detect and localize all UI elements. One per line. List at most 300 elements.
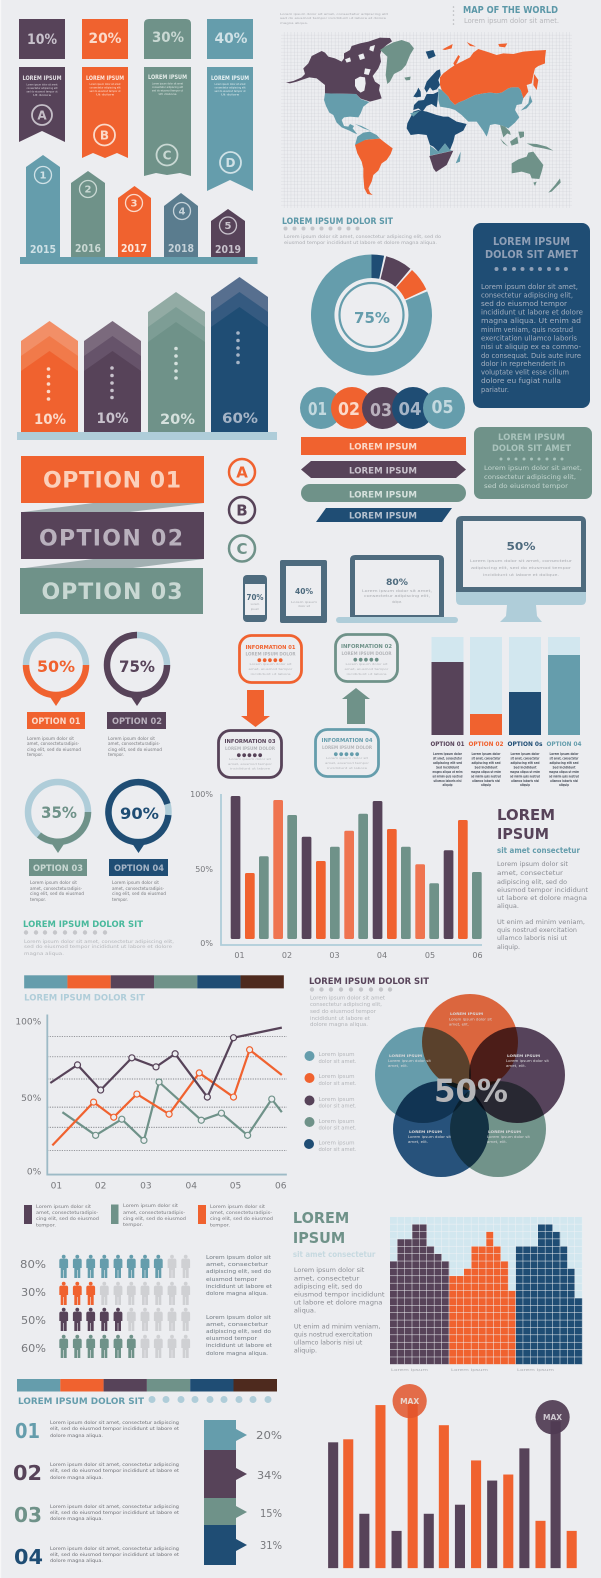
color strip <box>17 1379 277 1392</box>
side text column chart: Lorem ipsum dolor sit <box>497 861 569 868</box>
venn diagram: amet, elit. <box>388 1064 408 1068</box>
people notes <box>206 1255 273 1357</box>
venn diagram: LOREM IPSUM <box>389 1053 422 1058</box>
numbered circles: 04 <box>398 399 422 420</box>
stacked option bars: sit amet, consectetur <box>510 756 540 760</box>
people notes: dolore magna aliqua. <box>206 1291 268 1297</box>
venn diagram: LOREM IPSUM <box>507 1053 540 1058</box>
venn diagram: amet, elit. <box>506 1064 526 1068</box>
numbered circles: 02 <box>338 399 360 420</box>
information 02: INFORMATION 02 <box>341 644 392 650</box>
europe <box>413 50 441 112</box>
purple label <box>301 461 466 478</box>
ribbon A: consectetur adipiscing elit <box>26 86 58 90</box>
phone <box>243 575 267 622</box>
stacked option bars: ullamco laboris nisi <box>472 779 500 783</box>
devices <box>243 516 586 623</box>
side text column chart: sit amet consectetur <box>497 846 580 855</box>
mid text block: Ut enim ad minim veniam, <box>294 1324 380 1331</box>
bottom bar chart <box>328 1384 577 1568</box>
box 40% <box>207 19 253 59</box>
legend with three notes <box>24 1203 273 1228</box>
venn legend: Lorem ipsum <box>318 1052 354 1058</box>
ribbon B: Ut dolore <box>96 92 115 96</box>
stacked option bars: Lorem ipsum dolor <box>550 752 579 756</box>
green text panel <box>474 427 592 499</box>
arrow 2017 <box>118 186 151 257</box>
arrow 2017: 2017 <box>121 242 147 255</box>
map heading: Lorem ipsum dolor sit amet. <box>464 17 559 25</box>
gauge 35% option 03 <box>28 782 88 902</box>
venn heading <box>309 977 429 1028</box>
ribbon C: consectetur adipiscing elit <box>152 85 183 89</box>
venn legend: Lorem ipsum <box>318 1097 354 1103</box>
ribbon C: sed do eiusmod tempor ut <box>152 88 183 92</box>
ribbon D: Ut dolore <box>221 92 240 96</box>
stacked option bars: Sed incididunt <box>436 766 459 770</box>
side text column chart: eiusmod tempor incididunt <box>497 887 589 894</box>
donut chart 75% <box>311 254 432 375</box>
numbered list: Lorem ipsum dolor sit amet, consectetur adipiscing <box>50 1420 179 1426</box>
numbered list: 01 <box>15 1419 40 1443</box>
stacked option bars: Sed incididunt <box>514 766 537 770</box>
line chart heading: LOREM IPSUM DOLOR SIT <box>24 993 145 1003</box>
arrow down <box>241 690 270 727</box>
information 02: ●●●●● <box>353 657 380 663</box>
ribbon B <box>82 67 128 158</box>
information flow <box>218 634 398 778</box>
venn legend: dolor sit amet. <box>318 1081 357 1087</box>
venn legend: dolor sit amet. <box>318 1126 357 1132</box>
navy text panel: voluptate velit esse cillum <box>481 368 569 376</box>
arrow 2017: 3 <box>131 198 138 210</box>
navy text panel: dolor in reprehenderit in <box>481 360 565 368</box>
greenland <box>380 40 414 84</box>
ribbon C <box>144 67 191 176</box>
year arrows <box>20 155 258 264</box>
mid text block: adipiscing elit, sed do <box>294 1283 362 1290</box>
people notes: amet, consectetur <box>206 1262 269 1268</box>
stacked option bars: OPTION 02 <box>468 740 504 748</box>
column chart: 02 <box>282 951 292 960</box>
green heading with text: Lorem ipsum dolor sit amet, consectetur adipiscing elit, <box>24 939 174 945</box>
map heading: magna aliqua. <box>280 21 308 25</box>
stacked percent column: 20% <box>256 1430 282 1442</box>
navy text panel: nisi ut aliquip ex ea commo- <box>481 343 582 351</box>
option 02 <box>21 512 204 559</box>
legend with three notes: Lorem ipsum dolor sit <box>36 1204 91 1210</box>
information 04: amet, eiusmod tempor <box>325 761 370 765</box>
box 40%: 40% <box>214 31 248 47</box>
stacked option bars: magna aliqua ut enim <box>549 770 580 774</box>
information 04 <box>316 730 378 776</box>
navy text panel: Lorem ipsum dolor sit amet, <box>481 283 578 291</box>
ribbon D: consectetur adipiscing elit <box>214 86 246 90</box>
information 03: ●●●●● <box>237 752 263 758</box>
world map <box>281 32 572 208</box>
stacked option bars: aliquip <box>559 783 570 787</box>
stacked percent column <box>204 1420 282 1565</box>
phone: ipsum <box>251 607 260 611</box>
information 04: Lorem ipsum dolor sit <box>326 756 369 760</box>
stacked option bars: OPTION 01 <box>430 740 465 748</box>
rising arrows <box>17 277 277 440</box>
numbered list: elit, sed do eiusmod tempor incididunt ut labore et <box>50 1426 179 1432</box>
column chart: 100% <box>190 790 213 799</box>
side text column chart: amet, consectetur <box>497 870 563 877</box>
gauge 50% option 01: amet, consecteturadipis- <box>27 741 80 746</box>
arrow green 20% <box>148 292 205 432</box>
navy text panel: minim veniam, quis nostrud <box>481 326 573 334</box>
venn legend: dolor sit amet. <box>318 1059 357 1065</box>
numbered list: Lorem ipsum dolor sit amet, consectetur adipiscing <box>50 1504 179 1510</box>
max marker purple <box>535 1400 570 1434</box>
line chart: 05 <box>230 1182 241 1192</box>
information 02: Lorem ipsum dolor sit <box>346 662 389 666</box>
north america north <box>286 38 392 102</box>
gauge 90% option 04: 90% <box>120 804 159 823</box>
stacked option bars: aliquip <box>442 783 453 787</box>
orange label: LOREM IPSUM <box>349 442 417 452</box>
line chart: 100% <box>15 1018 42 1028</box>
southeast asia and oceania <box>500 125 561 193</box>
venn legend <box>304 1051 357 1153</box>
venn diagram: amet, elit. <box>408 1140 428 1144</box>
side text column chart: adipiscing elit, sed do <box>497 879 567 886</box>
people notes: Lorem ipsum dolor sit <box>206 1255 272 1261</box>
people notes: eiusmod tempor <box>206 1277 258 1283</box>
people notes: Lorem ipsum dolor sit <box>206 1315 272 1321</box>
venn diagram: Lorem ipsum dolor sit <box>449 1018 493 1022</box>
stacked option bars: adipiscing elit sed <box>433 761 463 765</box>
column chart: 50% <box>195 865 213 874</box>
ribbon A <box>19 67 65 142</box>
letter circles: B <box>236 502 248 520</box>
stacked option bars: adipiscing elit sed <box>510 761 540 765</box>
numbered list: elit, sed do eiusmod tempor incididunt ut labore et <box>50 1468 179 1474</box>
box 10%: 10% <box>27 32 57 48</box>
column chart: 06 <box>472 951 483 960</box>
option 01 <box>21 456 204 503</box>
venn diagram: Lorem ipsum dolor sit <box>388 1059 432 1063</box>
box 10% <box>19 19 65 59</box>
arrow 2018 <box>164 193 198 257</box>
numbered circles: 01 <box>308 399 327 420</box>
green text panel: consectetur adipiscing elit, <box>484 473 576 481</box>
arrow orange 10%: 10% <box>34 412 66 428</box>
stacked option bars: aliquip <box>481 783 492 787</box>
venn legend: Lorem ipsum <box>318 1074 354 1080</box>
map heading: Lorem ipsum dolor sit amet, consectetur adipiscing elit <box>280 12 389 16</box>
venn heading: incididunt ut labore et <box>310 1016 370 1022</box>
information 04: INFORMATION 04 <box>322 738 373 744</box>
side text column chart: quis nostrud exercitation <box>497 927 577 934</box>
heading: LOREM IPSUM DOLOR SIT <box>18 1397 145 1407</box>
legend with three notes: amet, consecteturadipis- <box>123 1210 186 1216</box>
stacked option bars: ullamco laboris nisi <box>511 779 539 783</box>
ribbon D <box>207 67 253 191</box>
phone: 70% <box>246 593 264 602</box>
column chart: 0% <box>200 939 213 948</box>
mid text block: eiusmod tempor incididunt <box>294 1291 385 1298</box>
navy text panel: DOLOR SIT AMET <box>485 249 579 261</box>
tablet: Lorem ipsum <box>291 600 317 604</box>
stacked option bars: adipiscing elit sed <box>472 761 501 765</box>
option 03 <box>20 568 203 614</box>
mid text block: amet, consectetur <box>294 1275 360 1282</box>
information 03: LOREM IPSUM DOLOR <box>225 746 275 752</box>
green text panel: LOREM IPSUM <box>498 433 565 443</box>
venn diagram: LOREM IPSUM <box>488 1129 521 1134</box>
mid text block: IPSUM <box>293 1229 345 1247</box>
mid text block: Lorem ipsum dolor sit <box>294 1267 365 1274</box>
arrow 2015: 1 <box>40 170 47 182</box>
people pictogram: 60% <box>21 1342 46 1355</box>
information 04: ●●●●● <box>334 752 360 758</box>
purple label: LOREM IPSUM <box>349 466 417 476</box>
people notes: amet, consectetur <box>206 1322 269 1328</box>
side text column chart: LOREM <box>497 806 555 824</box>
box 20%: 20% <box>88 31 122 47</box>
people notes: dolore magna aliqua. <box>206 1351 268 1357</box>
stacked option bars: magna aliqua ut enim <box>432 770 463 774</box>
russia <box>440 42 546 105</box>
navy text panel: do consequat. Duis aute irure <box>481 352 581 360</box>
donut heading: eiusmod tempor incididunt ut labore et dolore magna aliqua. <box>284 240 437 246</box>
green heading with text <box>23 920 174 957</box>
legend with three notes: Lorem ipsum dolor sit <box>210 1204 265 1210</box>
ribbon A: A <box>37 108 47 122</box>
line chart: 06 <box>275 1182 287 1192</box>
monitor: adipiscing elit, sed do eiusmod tempor <box>471 566 572 570</box>
gauge 35% option 03: amet, consecteturadipis- <box>30 886 83 891</box>
letter circles <box>229 459 255 562</box>
people pictogram: 30% <box>21 1286 46 1299</box>
information 03: incididunt ut labore <box>230 766 270 770</box>
stacked option bars: Sed incididunt <box>552 766 576 770</box>
venn diagram: Lorem ipsum dolor sit <box>408 1135 452 1139</box>
green text panel: sed do eiusmod tempor <box>484 482 568 490</box>
monitor: 50% <box>506 540 536 553</box>
stacked option bars: ad minim quis nostrud <box>432 774 463 778</box>
gauge 75% option 02: Lorem ipsum dolor sit <box>108 736 155 741</box>
stacked percent column: 31% <box>260 1540 282 1552</box>
arrow up <box>342 688 370 724</box>
information 01: INFORMATION 01 <box>246 645 296 651</box>
gauge 35% option 03: 35% <box>41 803 77 822</box>
gauge 90% option 04: OPTION 04 <box>114 864 164 874</box>
ribbon C: Ut dolore <box>158 92 177 96</box>
navy text panel: incididunt ut labore et dolore <box>481 308 583 316</box>
gauge 75% option 02: amet, consecteturadipis- <box>108 741 161 746</box>
letter circles: C <box>236 540 248 558</box>
stacked option bars: Lorem ipsum dolor <box>433 752 462 756</box>
side text column chart: aliqua. <box>497 903 519 910</box>
ribbon A: Lorem ipsum dolor sit amet <box>26 82 58 86</box>
venn heading: consectetur adipiscing elit, <box>310 1002 382 1008</box>
information 02 <box>336 634 398 682</box>
max marker orange: MAX <box>400 1397 419 1406</box>
side text column chart: Ut enim ad minim veniam, <box>497 919 585 926</box>
information 02: LOREM IPSUM DOLOR <box>342 651 392 657</box>
donut heading: Lorem ipsum dolor sit amet, consectetur adipiscing elit, sed do <box>284 234 441 240</box>
gauge 35% option 03: Lorem ipsum dolor sit <box>30 880 77 885</box>
gauge 75% option 02: tempor. <box>108 752 124 757</box>
gauge 50% option 01: Lorem ipsum dolor sit <box>27 736 74 741</box>
numbered list: dolore magna aliqua. <box>50 1433 103 1439</box>
people notes: eiusmod tempor <box>206 1336 258 1342</box>
arrow 2015: 2015 <box>30 243 56 256</box>
max marker orange <box>393 1384 427 1418</box>
arrow 2016: 2016 <box>75 242 101 255</box>
stacked option bars: sit amet, consectetur <box>472 756 501 760</box>
people notes: incididunt ut labore et <box>206 1343 273 1349</box>
mid text block: aliquip. <box>294 1348 317 1355</box>
gauge 35% option 03: tempor. <box>30 897 46 902</box>
legend with three notes: tempor. <box>36 1222 56 1228</box>
laptop: consectetur adipiscing elit, <box>364 594 430 598</box>
legend with three notes: amet, consecteturadipis- <box>210 1210 273 1216</box>
numbered list: 02 <box>13 1461 42 1485</box>
ribbons <box>19 67 253 191</box>
navy text panel: consectetur adipiscing elit, <box>481 292 573 300</box>
ribbon A: sed do eiusmod tempor ut <box>26 90 58 94</box>
green label: LOREM IPSUM <box>349 490 417 500</box>
donut chart 75%: 75% <box>354 309 390 327</box>
ribbon D: LOREM IPSUM <box>211 75 249 82</box>
green text panel: DOLOR SIT AMET <box>492 444 571 454</box>
legend with three notes: cing elit, sed do eiusmod <box>123 1216 186 1222</box>
ribbon B: consectetur adipiscing elit <box>90 86 120 90</box>
information 04: LOREM IPSUM DOLOR <box>322 745 372 751</box>
stacked option bars: sit amet, consectetur <box>550 756 579 760</box>
green heading with text: magna aliqua. <box>24 951 64 957</box>
navy text panel: magna aliqua. Ut enim ad <box>481 317 581 325</box>
information 03: Lorem ipsum dolor sit <box>229 757 272 761</box>
venn legend: dolor sit amet. <box>318 1104 357 1110</box>
orange label <box>301 437 466 455</box>
ribbon C: Lorem ipsum dolor sit amet <box>152 82 183 86</box>
venn legend: Lorem ipsum <box>318 1119 354 1125</box>
line chart section <box>15 975 287 1192</box>
venn diagram: amet, elit. <box>449 1022 469 1026</box>
option 02: OPTION 02 <box>39 526 183 552</box>
numbered list: dolore magna aliqua. <box>50 1558 103 1564</box>
tablet <box>280 560 327 623</box>
option ribbons <box>20 456 204 614</box>
legend with three notes: cing elit, sed do eiusmod <box>36 1216 99 1222</box>
africa <box>407 110 467 152</box>
box 30%: 30% <box>152 30 184 46</box>
numbered list: Lorem ipsum dolor sit amet, consectetur adipiscing <box>50 1462 179 1468</box>
line chart <box>15 1015 287 1192</box>
gauge 35% option 03: cing elit, sed do eiusmod <box>30 891 84 896</box>
numbered list: 03 <box>14 1503 42 1527</box>
mosaic skyline chart <box>390 1217 582 1372</box>
gauge 50% option 01: tempor. <box>27 752 43 757</box>
bottom left header <box>17 1379 277 1407</box>
stacked option bars: adipiscing elit sed <box>550 761 579 765</box>
side text column chart: ullamco laboris nisi ut <box>497 935 568 942</box>
arrow purple 10% <box>84 321 141 432</box>
monitor: Lorem ipsum dolor sit amet, consectetur <box>470 559 573 563</box>
north america south <box>324 93 380 145</box>
arrow 2016: 2 <box>85 184 92 196</box>
map heading: MAP OF THE WORLD <box>463 5 558 16</box>
arrow 2019 <box>211 209 245 257</box>
mosaic skyline chart: Lorem ipsum <box>451 1368 489 1372</box>
side text column chart <box>497 806 589 951</box>
stacked option bars: Lorem ipsum dolor <box>510 752 540 756</box>
numbered list: elit, sed do eiusmod tempor incididunt ut labore et <box>50 1552 179 1558</box>
information 01: Lorem ipsum dolor sit <box>250 662 293 666</box>
people notes: incididunt ut labore et <box>206 1284 273 1290</box>
column chart: 04 <box>377 951 387 960</box>
line chart: 02 <box>95 1182 106 1192</box>
map heading: sed do eiusmod tempor incididunt ut labore et dolore <box>280 16 386 20</box>
ribbon A: LOREM IPSUM <box>22 75 62 82</box>
arrow 2019: 2019 <box>215 243 241 256</box>
map heading <box>280 5 559 25</box>
gauge 35% option 03: OPTION 03 <box>33 864 83 874</box>
venn diagram: LOREM IPSUM <box>409 1129 442 1134</box>
option 01: OPTION 01 <box>43 468 181 494</box>
line chart: 01 <box>51 1182 62 1192</box>
venn heading: sed do eiusmod tempor <box>310 1009 377 1015</box>
stacked option bars: Lorem ipsum dolor <box>472 752 501 756</box>
laptop <box>336 555 458 623</box>
green heading with text: sed do eiusmod tempor incididunt ut labore et dolore <box>24 944 172 950</box>
arrow 2015 <box>26 155 60 257</box>
column chart: 01 <box>234 951 245 960</box>
navy text panel: LOREM IPSUM <box>493 236 570 248</box>
venn diagram <box>375 994 565 1177</box>
ribbon C: LOREM IPSUM <box>148 74 187 81</box>
navy text panel: sed do eiusmod tempor <box>481 300 567 308</box>
people notes: adipiscing elit, sed do <box>206 1269 272 1275</box>
stacked option bars: aliquip <box>520 783 531 787</box>
information 04: incididunt ut labore <box>327 766 367 770</box>
arrow 2018: 4 <box>179 206 186 218</box>
south america <box>355 139 393 195</box>
stacked percent column: 34% <box>257 1470 282 1482</box>
green label <box>301 484 466 502</box>
column chart: 03 <box>329 951 340 960</box>
navy text panel <box>473 223 590 408</box>
ribbon A: Ut dolore <box>33 93 52 97</box>
information 03 <box>218 730 282 778</box>
stacked option bars <box>430 637 582 787</box>
information 03: INFORMATION 03 <box>224 739 276 745</box>
arrow 2019: 5 <box>225 221 232 232</box>
venn heading: Lorem ipsum dolor sit amet <box>310 996 385 1002</box>
stacked option bars: magna aliqua ut enim <box>510 770 541 774</box>
stacked option bars: ad minim quis nostrud <box>471 774 502 778</box>
venn legend: dolor sit amet. <box>318 1147 357 1153</box>
navy text panel: dolore eu fugiat nulla <box>481 377 561 385</box>
navy label: LOREM IPSUM <box>349 512 417 522</box>
box 30% <box>144 19 191 59</box>
arrow green 20%: 20% <box>160 412 195 428</box>
information 02: amet, eiusmod tempor <box>344 667 389 671</box>
base bar <box>20 257 258 264</box>
label bars <box>301 437 466 522</box>
stacked option bars: OPTION 0s <box>508 740 543 748</box>
side text column chart: aliquip. <box>497 944 520 951</box>
numbered list: dolore magna aliqua. <box>50 1475 103 1481</box>
stacked option bars: ad minim quis nostrud <box>549 774 580 778</box>
people notes: adipiscing elit, sed do <box>206 1329 272 1335</box>
